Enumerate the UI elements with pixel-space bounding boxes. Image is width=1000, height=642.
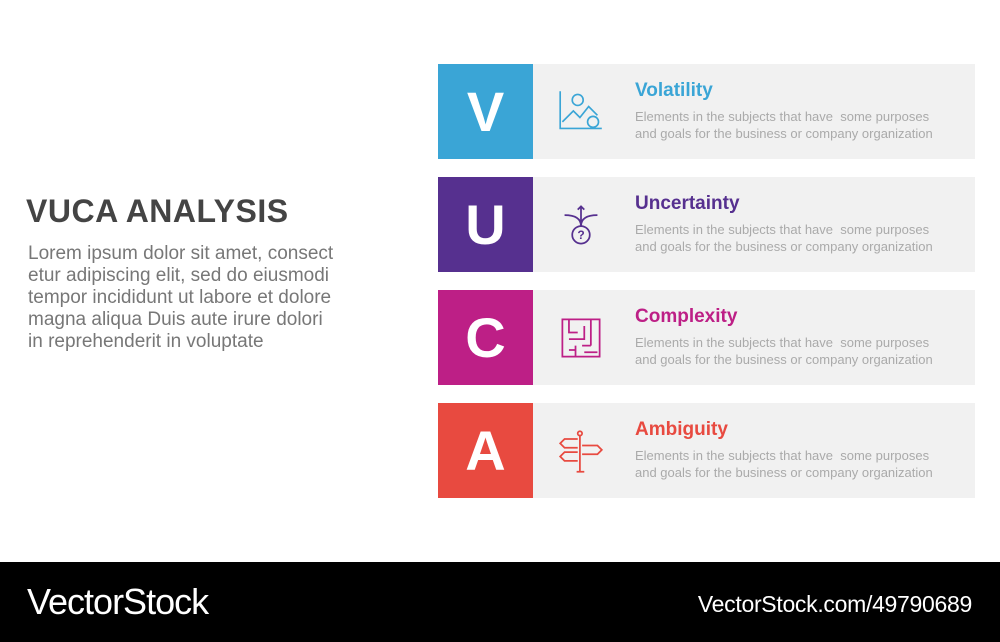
panel: volatility	[438, 64, 975, 159]
heading: Uncertainty	[635, 193, 740, 214]
description: Elements in the subjects that have some purposes	[635, 448, 929, 463]
heading: Complexity	[635, 306, 737, 327]
description: and goals for the business or company organization	[635, 465, 933, 480]
description	[635, 109, 933, 141]
footer bar	[0, 562, 1000, 642]
footer url: VectorStock.com/49790689	[698, 591, 972, 617]
title: VUCA ANALYSIS	[26, 193, 289, 229]
intro text: Lorem ipsum dolor sit amet, consect	[28, 243, 333, 264]
description: and goals for the business or company organization	[635, 239, 933, 254]
icon: maze	[562, 318, 600, 358]
description: Elements in the subjects that have some purposes	[635, 222, 929, 237]
panel: uncertainty	[438, 177, 975, 272]
letter A	[438, 403, 533, 498]
intro text: tempor incididunt ut labore et dolore	[28, 287, 331, 308]
description	[635, 335, 933, 367]
description	[635, 448, 933, 480]
icon: signpost	[559, 430, 603, 473]
icon: chart	[559, 91, 602, 130]
panel: ambiguity	[438, 403, 975, 498]
description: Elements in the subjects that have some purposes	[635, 335, 929, 350]
description: and goals for the business or company organization	[635, 352, 933, 367]
intro text	[28, 243, 333, 352]
icon: arrows question: ?	[577, 228, 585, 242]
description	[635, 222, 933, 254]
heading: Ambiguity	[635, 419, 728, 440]
letter C: C	[465, 306, 506, 369]
letter A: A	[465, 419, 506, 482]
letter U: U	[465, 193, 506, 256]
footer logo: VectorStock	[27, 581, 208, 622]
description: Elements in the subjects that have some purposes	[635, 109, 929, 124]
intro text: etur adipiscing elit, sed do eiusmodi	[28, 265, 329, 286]
intro text: in reprehenderit in voluptate	[28, 331, 264, 352]
intro text: magna aliqua Duis aute irure dolori	[28, 309, 323, 330]
letter V: V	[467, 80, 504, 143]
description: and goals for the business or company organization	[635, 126, 933, 141]
letter C	[438, 290, 533, 385]
letter V	[438, 64, 533, 159]
panel: complexity	[438, 290, 975, 385]
heading: Volatility	[635, 80, 713, 101]
icon: arrows question	[564, 205, 598, 244]
letter U	[438, 177, 533, 272]
